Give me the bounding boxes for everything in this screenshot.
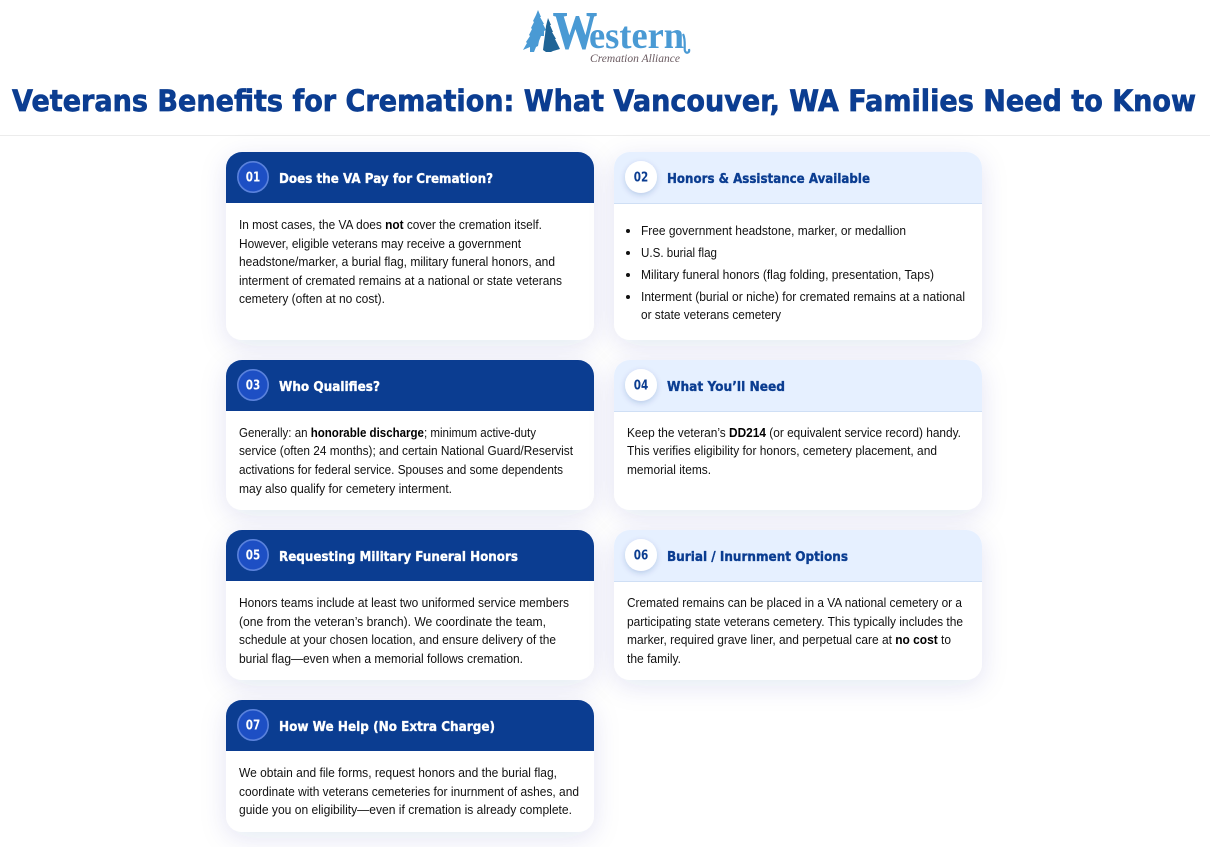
card body text [627,596,963,666]
card body text: the family. [627,652,681,666]
card body text: This verifies eligibility for honors, cemetery placement, and [627,444,937,458]
card body text: Generally: an honorable discharge; minimum active-duty [239,426,537,440]
bullet list: U.S. burial flag [641,246,717,260]
card body text [239,766,579,817]
card body text: marker, required grave liner, and perpetual care at no cost to [627,633,951,647]
card body text [627,426,961,477]
card body text: Honors teams include at least two uniformed service members [239,596,569,610]
card body text [239,596,569,666]
card body text: burial flag—even when a memorial follows cremation. [239,652,523,666]
number badge 06 [625,539,657,571]
number badge 05 [238,540,268,570]
card header [614,530,982,582]
logo wordmark: W [553,2,597,60]
number badge 04 [625,369,657,401]
card body text: cemetery (often at no cost). [239,292,385,306]
number badge 07 [238,710,268,740]
card header [614,152,982,204]
number badge 04: 04 [634,378,648,394]
card heading: Honors & Assistance Available [667,171,870,187]
card header [226,700,594,751]
number badge 07: 07 [246,718,260,734]
card heading: Burial / Inurnment Options [667,549,848,565]
number badge 01: 01 [246,170,260,186]
card body text: Keep the veteran’s DD214 (or equivalent service record) handy. [627,426,961,440]
card body text: interment of cremated remains at a national or state veterans [239,274,562,288]
number badge 02 [625,161,657,193]
number badge 03: 03 [246,378,260,394]
bullet list [626,224,965,322]
card body text: participating state veterans cemetery. This typically includes the [627,615,963,629]
card body text: guide you on eligibility—even if cremation is already complete. [239,803,572,817]
card body text: memorial items. [627,463,711,477]
card heading: Does the VA Pay for Cremation? [279,171,493,187]
card header [226,152,594,203]
panel: 03 Who Qualifies? [226,360,594,510]
card body text: However, eligible veterans may receive a government [239,237,521,251]
card body text: We obtain and file forms, request honors and the burial flag, [239,766,557,780]
card body text: service (often 24 months); and certain National Guard/Reservist [239,444,573,458]
number badge 06: 06 [634,548,648,564]
bullet list: or state veterans cemetery [641,308,782,322]
panel: 05 Requesting Military Funeral Honors [226,530,594,680]
card heading: What You’ll Need [667,379,785,395]
card body text: coordinate with veterans cemeteries for inurnment of ashes, and [239,785,579,799]
logo: Western Cremation Alliance [523,2,689,65]
number badge 03 [238,370,268,400]
number badge 05: 05 [246,548,260,564]
card body text: Cremated remains can be placed in a VA national cemetery or a [627,596,962,610]
panel: 04 What You'll Need [614,360,982,510]
logo tagline: Cremation Alliance [590,53,680,65]
card heading: How We Help (No Extra Charge) [279,719,495,735]
card heading: Who Qualifies? [279,379,380,395]
card body text: activations for federal service. Spouses and some dependents [239,463,563,477]
card body text: schedule at your chosen location, and ensure delivery of the [239,633,556,647]
icon: small pine tree [543,18,560,52]
card body text: headstone/marker, a burial flag, military funeral honors, and [239,255,555,269]
panel: 06 Burial / Inurnment Options [614,530,982,680]
panel: 01 Does the VA Pay for Cremation? [226,152,594,340]
card body text: may also qualify for cemetery interment. [239,482,452,496]
number badge 01 [238,162,268,192]
card body text [239,218,562,306]
logo wordmark: estern [589,15,684,57]
panel: 07 How We Help (No Extra Charge) [226,700,594,832]
card header [614,360,982,412]
bullet list: Military funeral honors (flag folding, presentation, Taps) [641,268,934,282]
icon: large pine tree [523,10,546,52]
card body text [239,426,573,496]
card body text: In most cases, the VA does not cover the cremation itself. [239,218,542,232]
logo wordmark [553,2,689,60]
card heading: Requesting Military Funeral Honors [279,549,518,565]
bullet list: Free government headstone, marker, or medallion [641,224,906,238]
number badge 02: 02 [634,170,648,186]
card header [226,530,594,581]
panel: 02 Honors & Assistance Available [614,152,982,340]
card body text: (one from the veteran’s branch). We coordinate the team, [239,615,546,629]
card header [226,360,594,411]
bullet list: Interment (burial or niche) for cremated remains at a national [641,290,965,304]
